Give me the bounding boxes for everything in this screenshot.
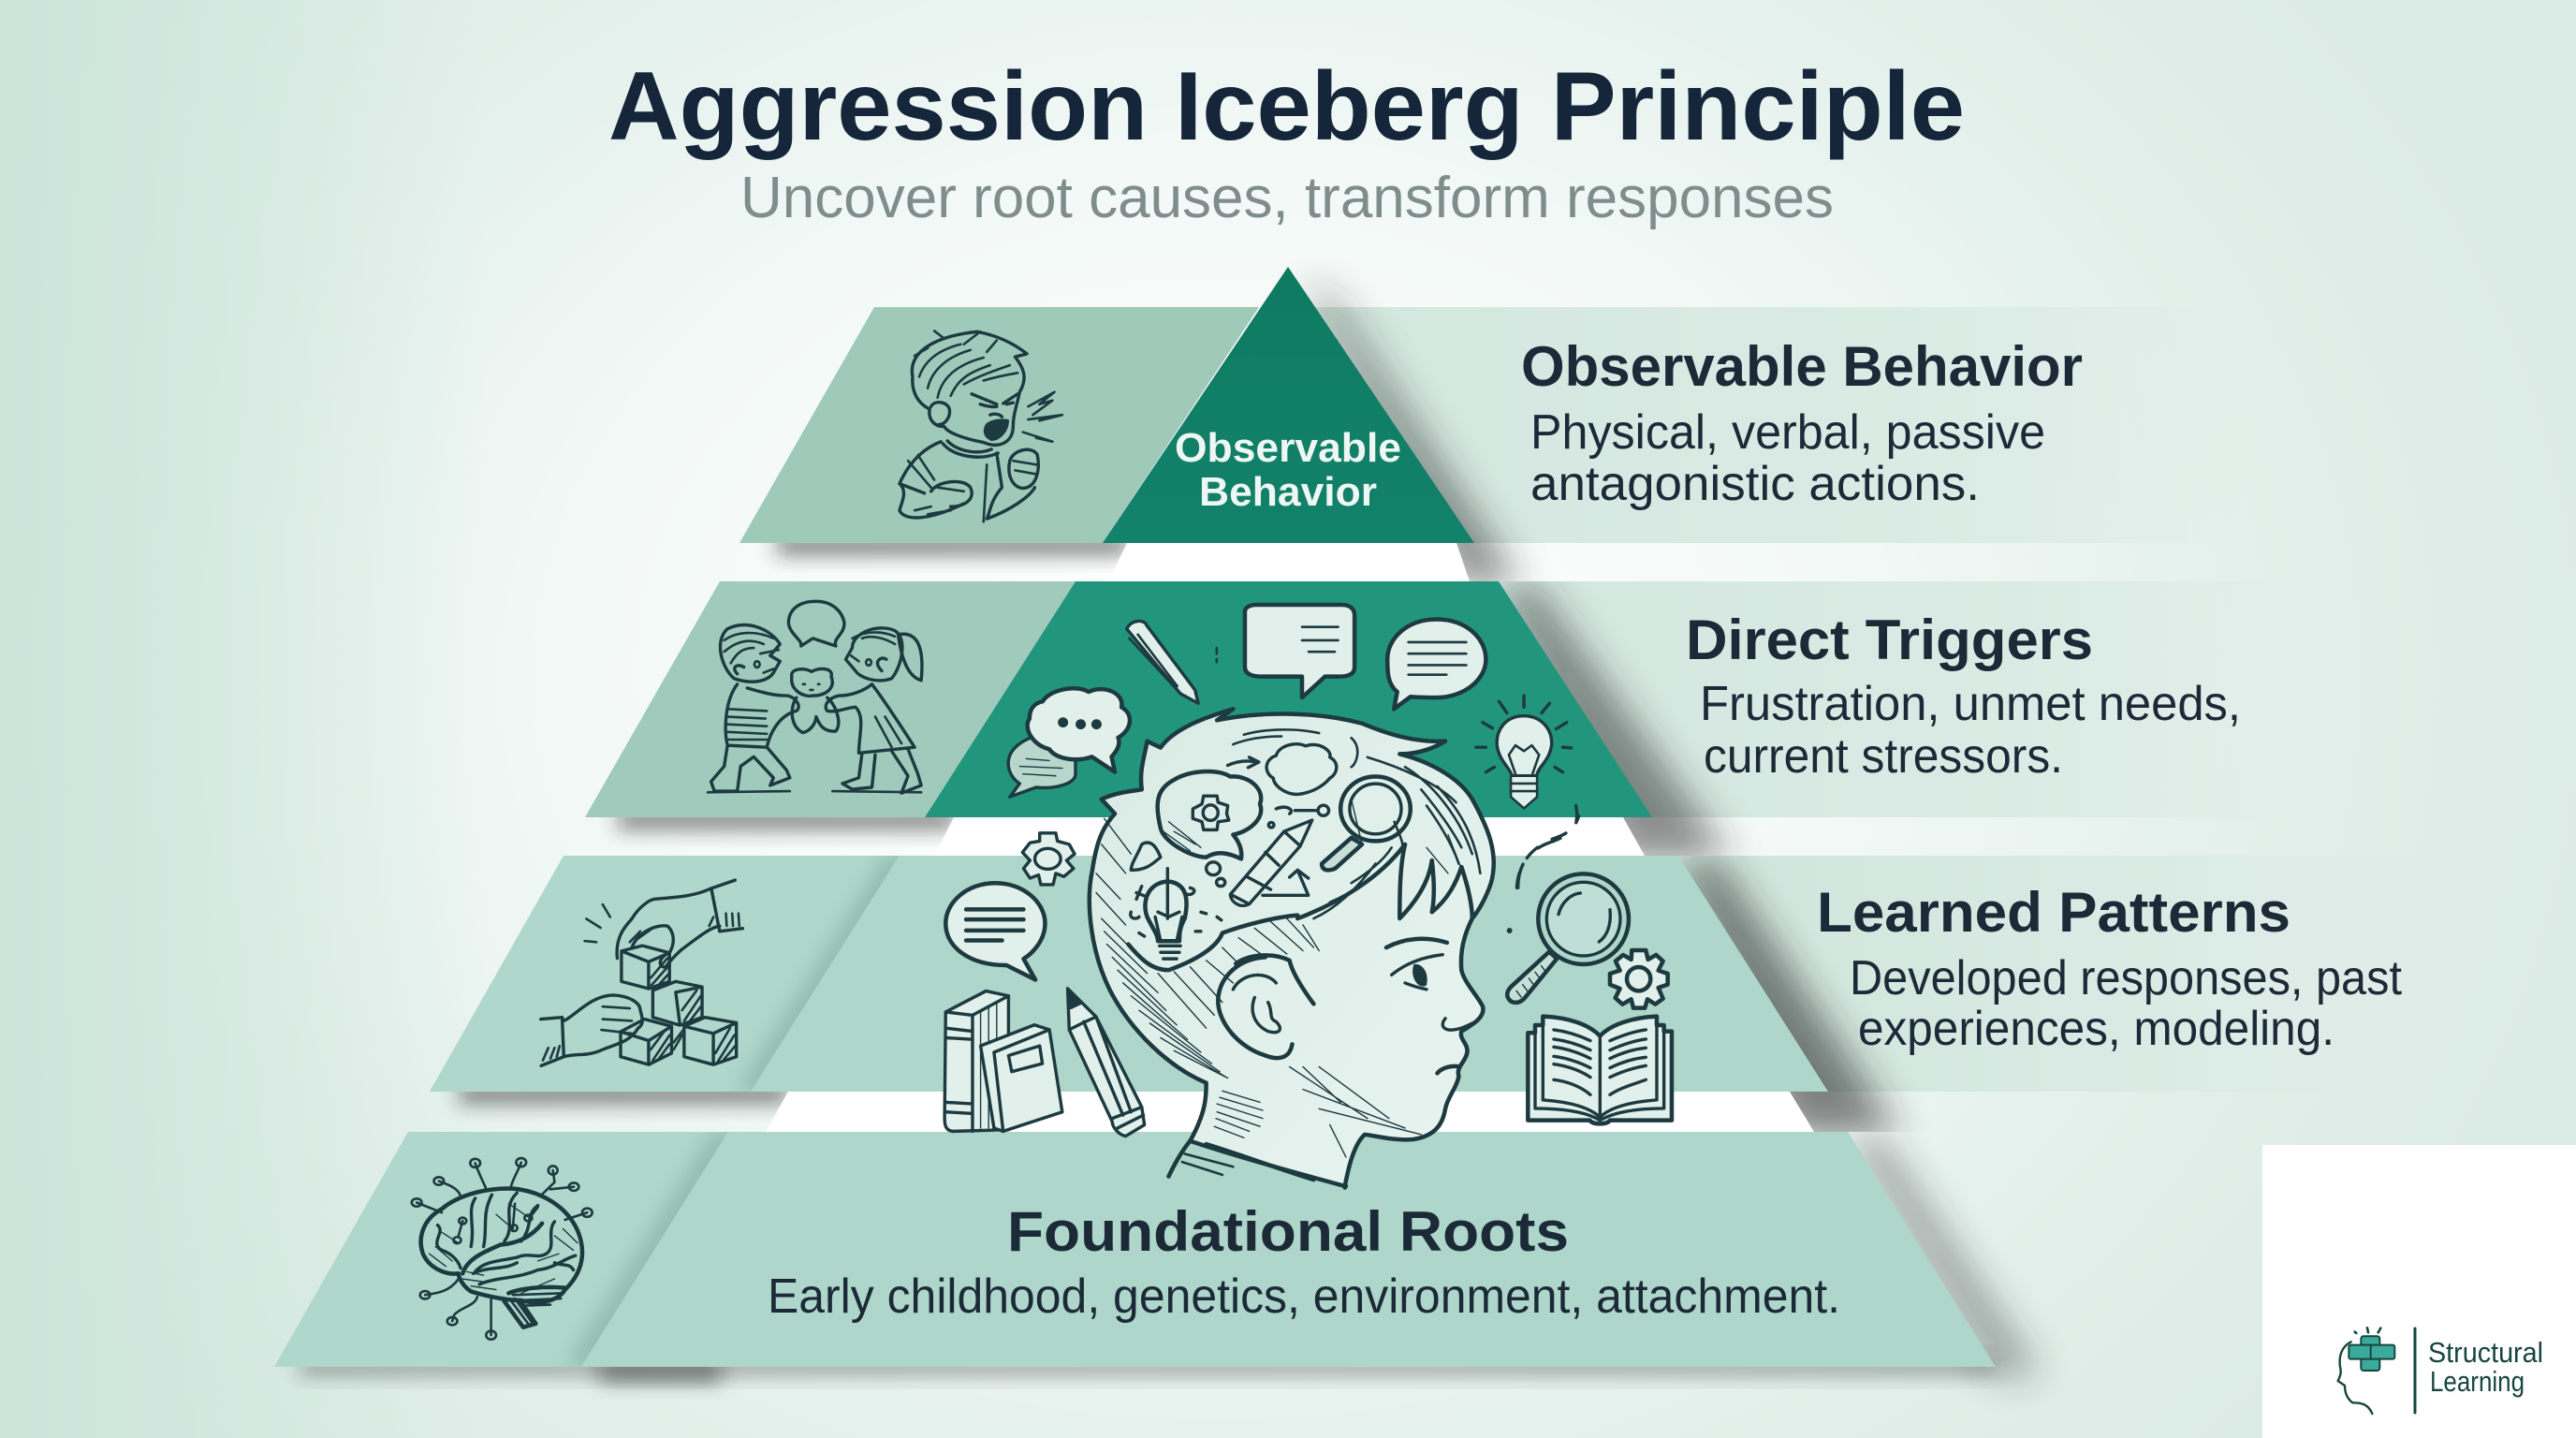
logo wordmark xyxy=(2428,1336,2543,1398)
text block: observable behavior xyxy=(1521,335,2083,511)
thought cloud with gear xyxy=(1158,771,1261,858)
eye and brow xyxy=(1386,939,1447,947)
text block: observable behavior: Physical, verbal, passive xyxy=(1530,405,2045,460)
text block: direct triggers: Direct Triggers xyxy=(1686,609,2093,671)
subtitle: Uncover root causes, transform responses xyxy=(740,166,1834,230)
logo wordmark: Structural xyxy=(2428,1336,2543,1369)
text block: observable behavior: Observable Behavior xyxy=(1521,335,2083,398)
magnifier in the head xyxy=(1340,777,1411,841)
label: observable behavior on triangle: Observable xyxy=(1175,425,1401,471)
text block: learned patterns: Learned Patterns xyxy=(1817,881,2291,944)
icon: magnifying glass xyxy=(1538,873,1629,964)
ear xyxy=(1218,957,1292,1058)
icon: round speech bubble xyxy=(1387,619,1486,709)
icons: book pile, pencil, gear and bubble on the patterns tier xyxy=(944,833,1145,1137)
head silhouette xyxy=(1090,709,1494,1186)
panel: learned patterns tier xyxy=(430,856,2471,1135)
text block: direct triggers: Frustration, unmet needs, xyxy=(1700,677,2241,731)
text block: foundational roots: Early childhood, genetics, environment, attachment. xyxy=(768,1269,1840,1324)
text block: direct triggers: current stressors. xyxy=(1704,729,2063,784)
text block: direct triggers xyxy=(1686,609,2241,784)
text block: learned patterns xyxy=(1817,881,2403,1056)
text block: learned patterns: Developed responses, past xyxy=(1850,951,2403,1005)
icon: brain with circuit nodes xyxy=(412,1158,593,1340)
small cloud xyxy=(1266,744,1337,794)
illustration: child's head in profile with thoughts xyxy=(1090,709,1494,1188)
back of head hatching xyxy=(1096,800,1470,1078)
text block: foundational roots: Foundational Roots xyxy=(1007,1200,1569,1263)
label: observable behavior on triangle: Behavior xyxy=(1199,469,1377,515)
neck hatching xyxy=(1214,1067,1421,1157)
icons: magnifier, gear and open book on the patterns tier xyxy=(1507,816,1672,1123)
icon: back grey speech bubble xyxy=(1008,734,1076,797)
icon: gear xyxy=(1022,833,1075,885)
text block: foundational roots xyxy=(768,1200,1840,1324)
icon: gear xyxy=(1610,950,1668,1008)
label: observable behavior on triangle xyxy=(1175,425,1401,515)
light bulb in the head xyxy=(1145,881,1187,941)
icon: dashed path linking bulb to magnifier xyxy=(1516,806,1577,888)
panel: logo box xyxy=(2262,1145,2576,1438)
icon: speech bubble xyxy=(945,883,1045,980)
text block: observable behavior: antagonistic actions. xyxy=(1530,457,1980,511)
icon: logo head and blocks xyxy=(2338,1328,2415,1414)
panel: direct triggers tier xyxy=(585,581,2312,859)
collar xyxy=(1168,1141,1346,1188)
panel: foundational roots tier xyxy=(274,1132,2041,1381)
icon: light bulb xyxy=(1497,716,1552,776)
pencil in the head xyxy=(1230,820,1312,905)
logo wordmark: Learning xyxy=(2430,1365,2525,1398)
icon: pencil xyxy=(1127,621,1198,703)
panel: observable behavior tier xyxy=(739,267,2247,585)
icon: stacking building blocks xyxy=(541,880,742,1065)
icon: open book xyxy=(1528,1017,1672,1123)
title: Aggression Iceberg Principle xyxy=(608,52,1965,161)
hair fringe and sideburn xyxy=(1128,844,1472,1004)
icon: cloud speech bubble xyxy=(1028,688,1130,772)
icons: thought bubbles, pencil and bulb on the triggers tier xyxy=(1008,605,1572,808)
icon: pencil xyxy=(1068,989,1145,1137)
nose and mouth xyxy=(1442,1019,1472,1030)
icon: books xyxy=(944,991,1008,1131)
icon: two children pulling a teddy bear xyxy=(708,601,922,793)
icon: angry shouting boy xyxy=(900,330,1062,521)
text block: learned patterns: experiences, modeling. xyxy=(1858,1002,2334,1056)
icon: rectangular speech bubble xyxy=(1245,605,1354,697)
